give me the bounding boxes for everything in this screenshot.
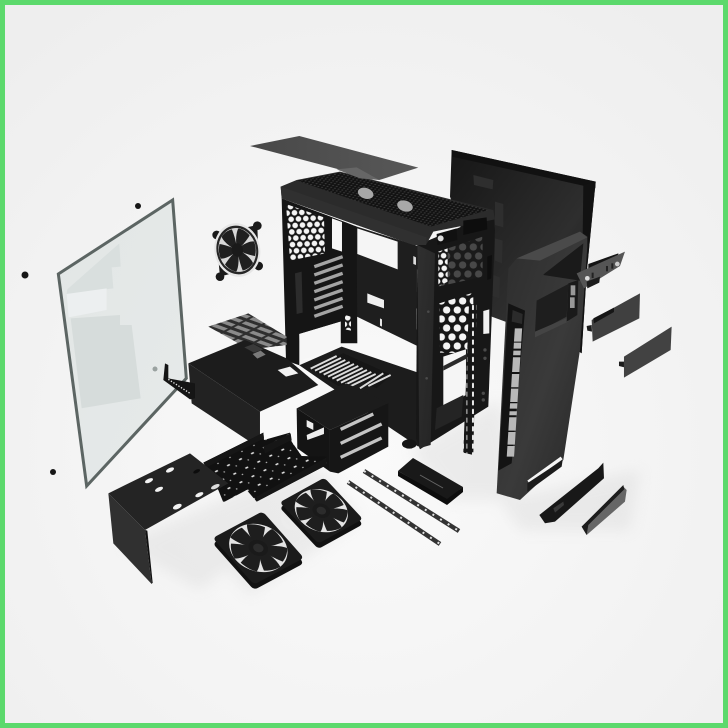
loose screw left [22,272,28,278]
main case chassis [281,172,495,455]
left intake mesh [498,303,525,471]
case floor [299,347,465,447]
IO bracket [577,252,625,288]
upper windows [543,243,583,281]
drive cage [297,383,388,473]
top dust filter sheet [250,136,418,180]
bottom slot [527,457,563,483]
expansion slots [314,257,343,316]
LED strip B [348,482,440,544]
drive bay cover lower [619,327,672,378]
ring fan [209,219,265,281]
drive rails tray [203,433,327,502]
bezel foot B [582,485,627,535]
bezel foot A [539,463,604,523]
top cover with mesh and fan openings [281,172,495,245]
motherboard tray [347,223,420,347]
small PCI bracket [163,363,195,399]
soft floor shadows [120,400,640,595]
SSD box [398,458,463,505]
drive bay cover upper [587,293,640,342]
front bezel [497,232,587,500]
case foot [402,439,417,449]
mesh filter plate [208,313,287,348]
ghost reflection of chassis [67,243,141,408]
mounting plate [108,453,228,584]
panel recesses [473,175,503,298]
tempered glass panel [58,200,186,486]
front frame [416,213,495,449]
fan 1 [211,508,308,590]
right intake mesh [567,280,578,322]
grey screw behind glass [152,366,158,372]
fan 2 [278,475,366,549]
PSU shroud [188,340,318,448]
loose screw top [135,203,141,209]
drive ladder strip [463,303,477,455]
back side panel [450,150,596,353]
loose screw bottom [50,469,56,475]
LED strip A [364,471,459,531]
rear panel with hex mesh and slots [282,198,357,365]
